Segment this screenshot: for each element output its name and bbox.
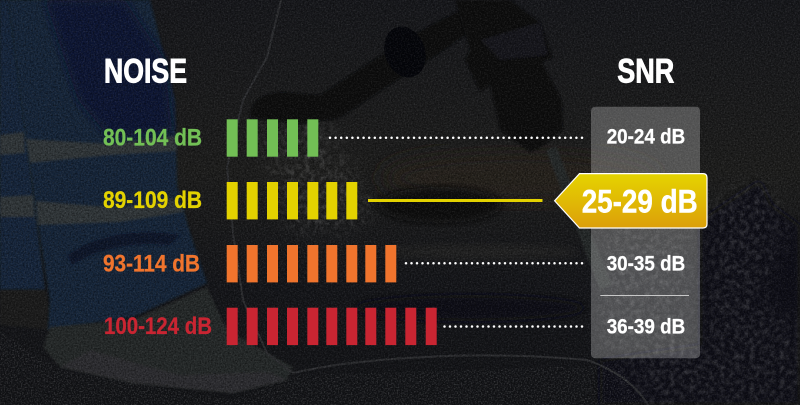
reflective stripes bbox=[0, 132, 184, 225]
row 1 bars: green bbox=[227, 119, 318, 157]
row 1 SNR value: 20-24 dB: 20-24 dB bbox=[607, 125, 685, 149]
row 4 bars: red bbox=[227, 308, 437, 345]
jackhammer bbox=[250, 0, 490, 124]
rubble texture bbox=[261, 122, 800, 405]
row 3 bars: orange bbox=[227, 245, 396, 282]
boot bbox=[43, 287, 293, 393]
row 2 highlighted callout: 25-29 dB bbox=[555, 174, 707, 228]
front leg bbox=[8, 0, 207, 330]
panel: SNR column bbox=[591, 107, 700, 358]
row 3 dotted connector bbox=[404, 262, 582, 265]
row 4 SNR value: 36-39 dB: 36-39 dB bbox=[607, 315, 685, 339]
row 3 SNR value: 30-35 dB: 30-35 dB bbox=[607, 251, 685, 275]
row 3 label: 93-114 dB: 93-114 dB bbox=[103, 250, 200, 277]
heading: SNR: SNR bbox=[617, 53, 674, 91]
row 2 label: 89-109 dB: 89-109 dB bbox=[103, 187, 202, 214]
heading: NOISE: NOISE bbox=[104, 53, 187, 91]
row 1 dotted connector bbox=[329, 137, 582, 139]
row 4 label: 100-124 dB: 100-124 dB bbox=[104, 313, 212, 340]
row 4 dotted connector bbox=[444, 325, 582, 328]
back leg bbox=[0, 0, 45, 290]
row 2 solid connector bbox=[368, 199, 542, 202]
row 1 label: 80-104 dB: 80-104 dB bbox=[103, 125, 202, 152]
row 2 bars: yellow bbox=[227, 182, 357, 219]
row 2 highlighted callout: 25-29 dB: 25-29 dB bbox=[582, 183, 698, 219]
cable bbox=[227, 0, 648, 405]
